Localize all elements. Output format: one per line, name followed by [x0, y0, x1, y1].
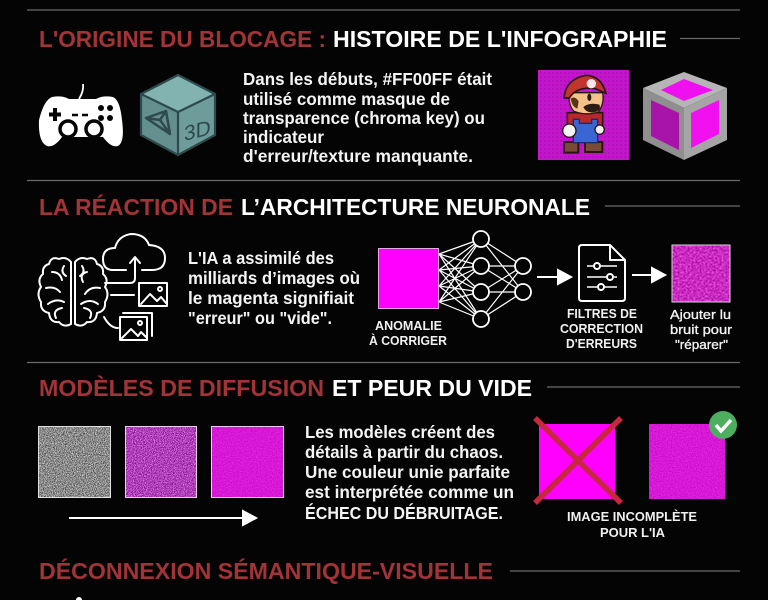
text block: denoising failure: détails à partir du chaos.	[305, 442, 503, 462]
heading: neural reaction: L’ARCHITECTURE NEURONALE	[241, 194, 590, 220]
heading: diffusion and fear of the void	[39, 374, 740, 401]
icon: Unity 3D cube: 3D	[184, 116, 211, 146]
label: anomaly to fix: À CORRIGER	[369, 333, 448, 348]
text block: magenta meaning: "erreur" ou "vide".	[188, 308, 332, 328]
arrow: denoising direction	[69, 511, 256, 525]
text block: denoising failure: Une couleur unie parfaite	[305, 462, 510, 482]
section: diffusion models	[38, 374, 740, 540]
heading: neural reaction: LA RÉACTION DE	[39, 193, 233, 220]
text block: denoising failure: ÉCHEC DU DÉBRUITAGE.	[305, 502, 503, 523]
icon: filter document	[579, 245, 625, 301]
text block: history: d'erreur/texture manquante.	[243, 146, 473, 166]
arrow: network to filters	[537, 270, 571, 284]
text block: magenta meaning: milliards d’images où	[188, 268, 360, 288]
text block: history: utilisé comme masque de	[243, 89, 450, 109]
section heading: semantic disconnect	[39, 557, 740, 600]
text block: magenta meaning	[188, 248, 360, 328]
icon: Unity 3D cube	[141, 75, 215, 155]
image: accepted noisy magenta with check	[649, 411, 737, 499]
heading: origin of the block: HISTOIRE DE L'INFOGRAPHIE	[333, 26, 667, 52]
text block: denoising failure: Les modèles créent des	[305, 422, 495, 442]
label: error correction filters	[560, 306, 643, 351]
text block: history: transparence (chroma key) ou	[243, 108, 485, 128]
arrow: filters to noise	[632, 268, 665, 282]
label: incomplete image: POUR L'IA	[600, 525, 666, 540]
text block: history: Dans les débuts, #FF00FF était	[243, 69, 492, 89]
text block: history: indicateur	[243, 127, 324, 147]
heading: diffusion and fear of the void: ET PEUR DU VIDE	[332, 375, 532, 401]
heading: origin of the block	[39, 26, 740, 52]
section: history of the infographic	[39, 26, 740, 166]
text block: history	[243, 69, 492, 166]
label: anomaly to fix: ANOMALIE	[375, 318, 442, 333]
image: noisy repaired square	[672, 245, 730, 302]
top rule	[27, 9, 740, 11]
text block: denoising failure: est interprétée comme un	[305, 482, 514, 502]
denoising steps	[38, 426, 284, 498]
heading: origin of the block: L'ORIGINE DU BLOCAGE :	[39, 26, 326, 52]
image: Mario on magenta	[538, 70, 629, 160]
label: incomplete image	[567, 509, 697, 540]
icon: game controller	[39, 84, 123, 146]
label: anomaly to fix	[369, 318, 448, 348]
icon: brain with cloud and images	[38, 234, 167, 340]
label: error correction filters: D'ERREURS	[566, 336, 637, 351]
divider two	[27, 362, 740, 364]
label: error correction filters: CORRECTION	[560, 321, 643, 336]
section heading: semantic disconnect: DÉCONNEXION SÉMANTIQUE-VISUELLE	[39, 557, 493, 584]
section: neural architecture	[38, 193, 740, 352]
neural network diagram	[378, 231, 531, 327]
label: error correction filters: FILTRES DE	[567, 306, 637, 321]
label: add noise to repair: Ajouter lu	[670, 307, 731, 322]
divider one	[27, 180, 740, 182]
image: rejected flat magenta	[535, 418, 621, 503]
text block: denoising failure	[305, 422, 514, 523]
icon: missing texture cube	[643, 72, 727, 160]
heading: diffusion and fear of the void: MODÈLES DE DIFFUSION	[39, 374, 324, 401]
text block: magenta meaning: L'IA a assimilé des	[188, 248, 334, 268]
label: incomplete image: IMAGE INCOMPLÈTE	[567, 509, 697, 524]
label: add noise to repair: bruit pour	[670, 322, 733, 337]
label: add noise to repair: "réparer"	[675, 337, 728, 352]
label: add noise to repair	[670, 307, 733, 352]
text block: magenta meaning: le magenta signifiait	[188, 288, 354, 308]
heading: neural reaction	[39, 193, 740, 220]
magenta anomaly square	[378, 248, 438, 308]
